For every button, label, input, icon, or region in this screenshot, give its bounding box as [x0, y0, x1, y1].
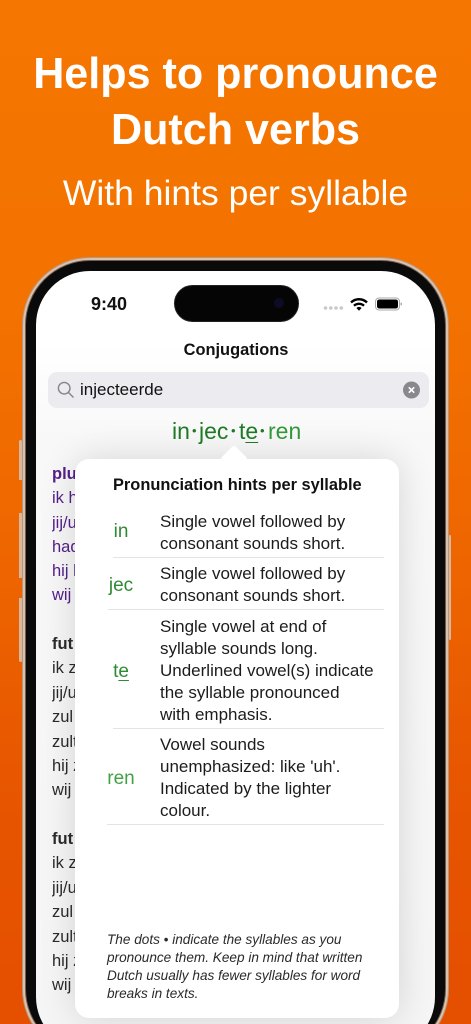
- hint: jec: [160, 564, 346, 605]
- hint: jec: Single vowel followed by: [160, 564, 345, 583]
- list: pluperfect: had: [52, 538, 80, 556]
- hint: te: syllable sounds long.: [160, 638, 318, 658]
- footnote: Dutch usually has fewer syllables for word: [107, 968, 360, 983]
- list: future 1: ik z: [52, 659, 77, 677]
- list: pluperfect: [52, 465, 82, 604]
- side button right: [449, 535, 451, 640]
- syllable word: in: [172, 418, 190, 444]
- hint: ren: unemphasized: like 'uh'.: [160, 756, 340, 776]
- list: future 2: wij: [52, 976, 71, 994]
- syllable word: jec: [199, 418, 228, 444]
- syllable: jec: jec: [109, 575, 133, 596]
- list: future 1: hij z: [52, 757, 81, 775]
- icon: clear: [403, 382, 420, 398]
- syllable word: te: [239, 418, 258, 444]
- hint: te: Single vowel at end of: [160, 616, 326, 636]
- list: pluperfect: jij/u: [52, 514, 77, 532]
- popover arrow: [220, 445, 248, 473]
- footnote: [106, 932, 362, 1001]
- syllable word: [172, 418, 301, 444]
- list: future 2: hij z: [52, 952, 81, 970]
- conjugation list: [52, 465, 82, 994]
- list: pluperfect: hij h: [52, 562, 82, 580]
- search text: injecteerde: [80, 380, 163, 399]
- hint: te: the syllable pronounced: [160, 682, 340, 702]
- icon: search: [58, 382, 74, 398]
- list: future 2: ik z: [52, 854, 77, 872]
- hint: in: Single vowel followed by: [160, 512, 345, 530]
- hint: ren: Vowel sounds: [160, 734, 265, 754]
- hint: ren: colour.: [160, 800, 210, 820]
- list: future 2: zul: [52, 903, 73, 921]
- footnote: breaks in texts.: [107, 986, 198, 1001]
- syllable word: •: [260, 423, 265, 438]
- icon: signal dots: [324, 306, 343, 310]
- syllable word: •: [231, 423, 236, 438]
- list: future 1: wij: [52, 781, 71, 799]
- icon: wifi: [350, 298, 368, 311]
- popover heading: Pronunciation hints per syllable: [113, 476, 362, 494]
- list: pluperfect: ik h: [52, 489, 78, 507]
- list: future 2: zult: [52, 928, 78, 946]
- syllable: ren: ren: [107, 768, 135, 789]
- hint: in: [160, 512, 346, 552]
- status bar time: 9:40: [91, 294, 127, 314]
- hint: in: consonant sounds short.: [160, 534, 345, 552]
- list: future 2: [52, 830, 81, 994]
- title: Helps to pronounce: [33, 50, 438, 98]
- list: future 1: zult: [52, 733, 78, 751]
- hint: ren: Indicated by the lighter: [160, 778, 331, 798]
- screen: [36, 271, 435, 1024]
- subtitle: With hints per syllable: [63, 173, 408, 213]
- title: Dutch verbs: [111, 106, 360, 154]
- side buttons left: [19, 440, 22, 662]
- syllable word: ren: [268, 418, 301, 444]
- list: future 1: fut: [52, 635, 73, 653]
- footnote: The dots • indicate the syllables as you: [107, 932, 341, 947]
- hint: jec: consonant sounds short.: [160, 586, 345, 605]
- list: pluperfect: wij: [52, 586, 71, 604]
- phone: [22, 257, 449, 1024]
- list: future 1: [52, 635, 81, 799]
- title: [33, 50, 438, 154]
- phone bezel: [25, 260, 446, 1024]
- icon: battery: [375, 298, 402, 310]
- popover panel: [75, 459, 399, 1018]
- hint: te: [160, 616, 374, 724]
- nav title: Conjugations: [184, 341, 288, 359]
- list: future 2: fut: [52, 830, 73, 848]
- footnote: pronounce them. Keep in mind that written: [107, 950, 362, 965]
- list: future 1: zul: [52, 708, 73, 726]
- hint: ren: [160, 734, 340, 820]
- dynamic island: [174, 285, 299, 322]
- phone frame: [23, 258, 448, 1024]
- syllable: in: in: [114, 521, 128, 542]
- list: future 1: jij/u: [52, 684, 77, 702]
- hint: te: with emphasis.: [160, 704, 272, 724]
- icon: camera: [274, 298, 284, 308]
- list: pluperfect: plu: [52, 465, 77, 483]
- syllable word: •: [192, 423, 197, 438]
- search bar: [48, 372, 429, 408]
- syllable: te: te: [113, 661, 129, 682]
- hint: te: Underlined vowel(s) indicate: [160, 660, 374, 680]
- list: future 2: jij/u: [52, 879, 77, 897]
